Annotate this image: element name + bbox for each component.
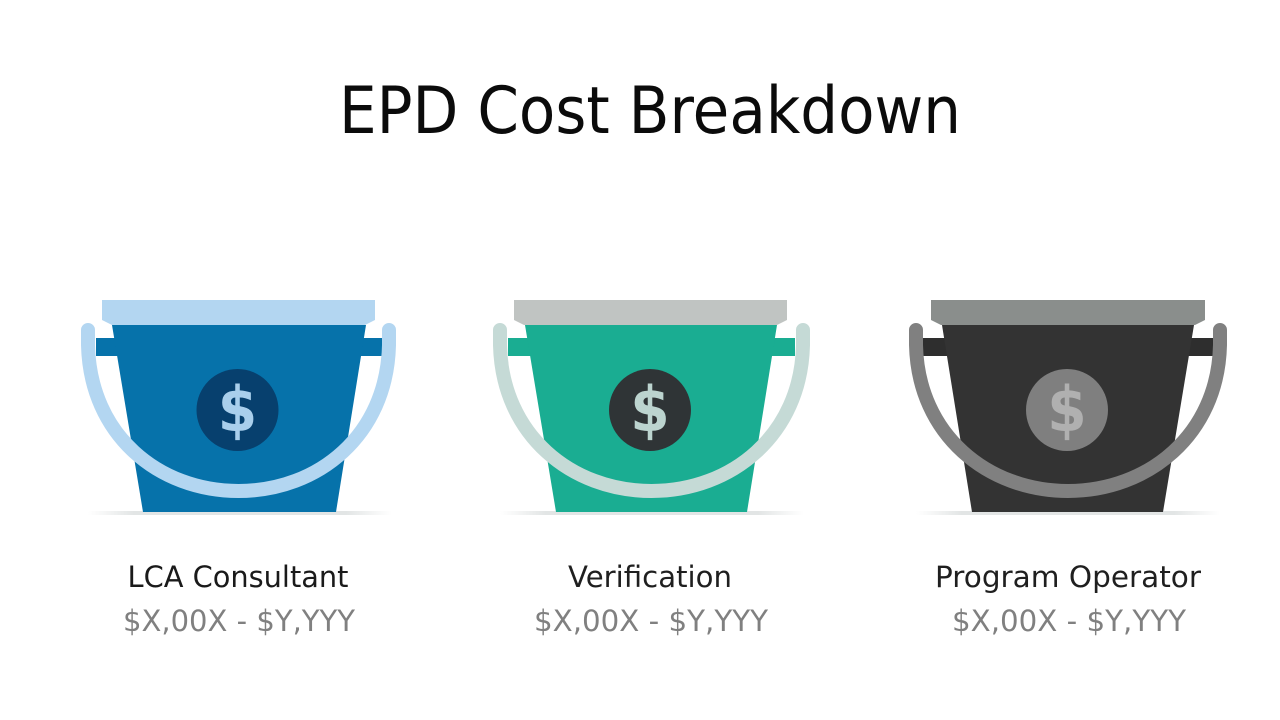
label: LCA Consultant: LCA Consultant bbox=[128, 560, 348, 594]
cost range: $X,00X - $Y,YYY bbox=[123, 604, 355, 638]
icon: blue bucket: $ bbox=[218, 375, 257, 447]
cost range: $X,00X - $Y,YYY bbox=[534, 604, 768, 638]
icon: blue bucket bbox=[88, 300, 392, 515]
panel: Verification bbox=[500, 300, 804, 638]
icon: dark bucket: $ bbox=[1047, 375, 1087, 447]
panel: LCA Consultant bbox=[88, 300, 392, 638]
label: Program Operator: Program Operator bbox=[935, 560, 1201, 594]
icon: dark bucket bbox=[916, 300, 1220, 515]
title: EPD Cost Breakdown bbox=[339, 74, 961, 149]
panel: Program Operator bbox=[916, 300, 1220, 638]
cost range: $X,00X - $Y,YYY bbox=[952, 604, 1186, 638]
icon: teal bucket: $ bbox=[630, 375, 670, 447]
icon: teal bucket bbox=[500, 300, 804, 515]
label: Verification: Verification bbox=[568, 560, 732, 594]
